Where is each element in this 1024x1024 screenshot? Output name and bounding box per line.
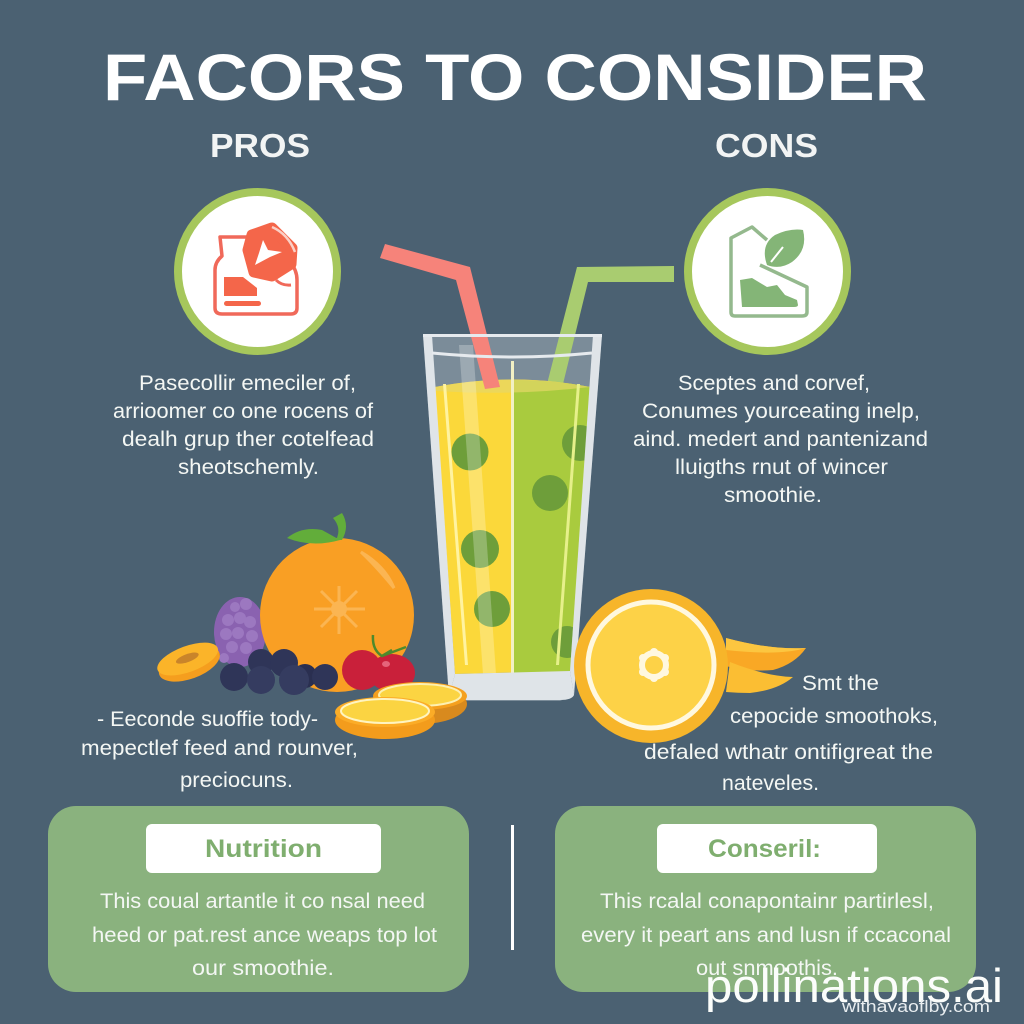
- heading: cons: CONS: [715, 127, 818, 164]
- panel: conseril: out snmoothis.: [696, 957, 838, 980]
- text block: pros description: [113, 372, 374, 479]
- illustration: smoothie glass with straws: [380, 244, 674, 701]
- text block: pros description: dealh grup ther cotelfead: [122, 428, 374, 451]
- panel: nutrition: heed or pat.rest ance weaps top lot: [92, 924, 437, 947]
- panel: nutrition: This coual artantle it co nsal need: [100, 890, 425, 913]
- text block: cons description: smoothie.: [724, 484, 822, 507]
- text block: lower-left note: mepectlef feed and rounver,: [81, 737, 358, 760]
- text block: lower-right note: Smt the: [802, 672, 879, 695]
- panel: nutrition: our smoothie.: [192, 957, 334, 980]
- text block: lower-right note: defaled wthatr ontifigreat the: [644, 741, 933, 764]
- text block: lower-right note: [644, 672, 938, 795]
- text block: lower-left note: [81, 708, 358, 792]
- title: FACORS TO CONSIDER: [103, 40, 927, 114]
- text block: cons description: lluigths rnut of wincer: [675, 456, 888, 479]
- text block: cons description: Conumes yourceating inelp,: [642, 400, 920, 423]
- text block: lower-left note: preciocuns.: [180, 769, 293, 792]
- panel: nutrition: [48, 806, 469, 992]
- heading: pros: PROS: [210, 127, 310, 164]
- icon: cons leaf and container: [688, 192, 847, 351]
- text block: lower-right note: nateveles.: [722, 772, 819, 795]
- text block: cons description: Sceptes and corvef,: [678, 372, 870, 395]
- illustration: lemon slice with wedges: [574, 589, 806, 743]
- panel: conseril: every it peart ans and lusn if ccaconal: [581, 924, 951, 947]
- panel: conseril: Conseril:: [708, 835, 821, 863]
- text block: cons description: aind. medert and pantenizand: [633, 428, 928, 451]
- text block: lower-right note: cepocide smoothoks,: [730, 705, 938, 728]
- watermark: withavaoflby.com: [841, 997, 990, 1016]
- panel: conseril: This rcalal conapontainr partirlesl,: [600, 890, 934, 913]
- text block: pros description: sheotschemly.: [178, 456, 319, 479]
- panel: conseril: [555, 806, 976, 992]
- watermark: pollinations.ai: [705, 959, 1003, 1012]
- text block: cons description: [633, 372, 928, 507]
- text block: pros description: Pasecollir emeciler of,: [139, 372, 356, 395]
- icon: pros bottle and clock: [178, 192, 337, 351]
- panel: nutrition: Nutrition: [205, 835, 322, 863]
- text block: pros description: arrioomer co one rocens of: [113, 400, 373, 423]
- text block: lower-left note: - Eeconde suoffie tody-: [97, 708, 318, 731]
- illustration: fruit pile: [153, 513, 467, 739]
